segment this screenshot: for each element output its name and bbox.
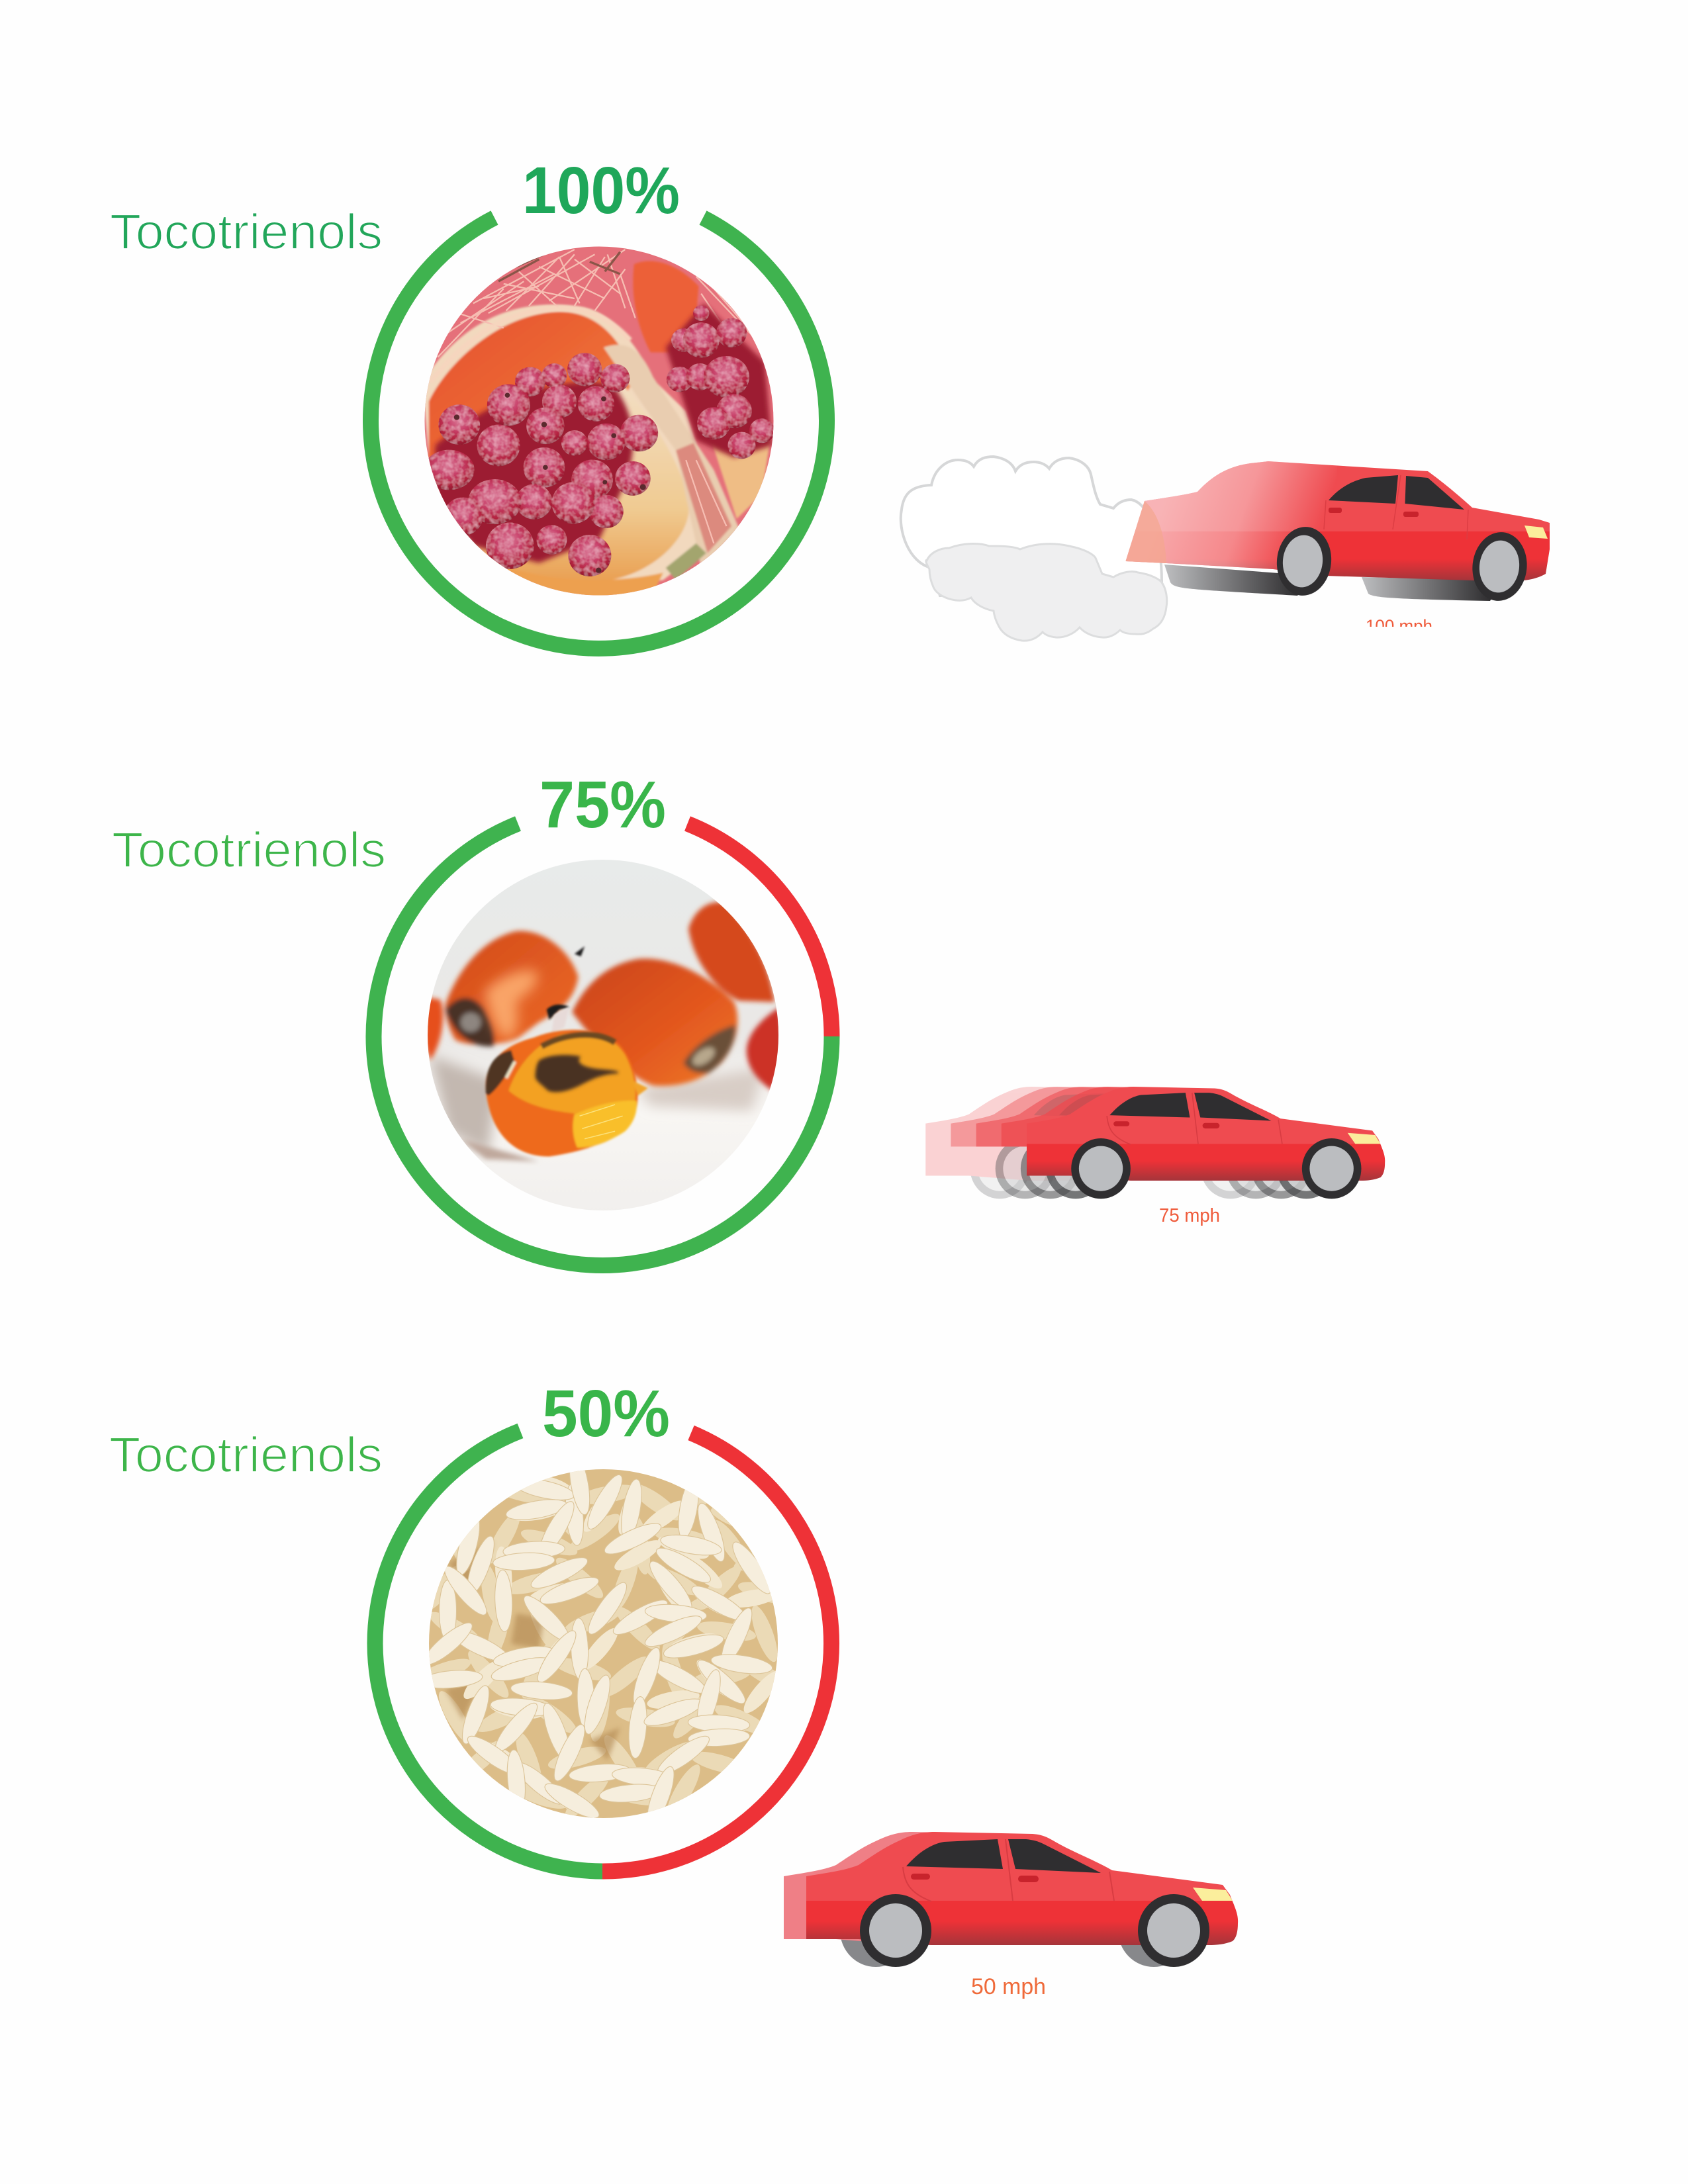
label: 75 mph: 75 mph [1159, 1205, 1220, 1226]
icon: red car with motion trail [925, 1087, 1385, 1199]
label: Tocotrienols: Tocotrienols [112, 822, 386, 878]
icon: red car with slight trail [784, 1832, 1238, 1967]
progress ring: green three quarters [373, 823, 831, 1265]
heading: 75%: 75% [539, 768, 666, 842]
section: car at 75 mph [925, 1087, 1385, 1226]
label: Tocotrienols: Tocotrienols [110, 204, 383, 259]
icon: smoke cloud outline [901, 457, 1162, 596]
icon: speeding red car [1125, 461, 1550, 604]
photo: red fruit with berries [418, 240, 782, 602]
photo: rice grains [429, 1469, 778, 1818]
photo: palm fruits [422, 855, 785, 1215]
icon: smoke cloud filled [926, 544, 1167, 641]
section: 75% tocotrienols [112, 768, 831, 1265]
progress ring: red half [602, 1433, 831, 1872]
label: Tocotrienols: Tocotrienols [109, 1427, 383, 1482]
progress ring: full green [371, 218, 827, 649]
label: 100 mph (clipped): 100 mph [1366, 616, 1432, 636]
section: 100% tocotrienols [110, 154, 827, 649]
heading: 100%: 100% [522, 154, 680, 228]
section: 50% tocotrienols [109, 1377, 831, 1872]
label: 50 mph: 50 mph [971, 1974, 1046, 1999]
section: car at 100 mph with smoke [901, 457, 1550, 641]
section: car at 50 mph [784, 1832, 1238, 1999]
heading: 50%: 50% [542, 1377, 670, 1451]
progress ring: red quarter [687, 823, 831, 1036]
progress ring: green half [375, 1431, 602, 1872]
